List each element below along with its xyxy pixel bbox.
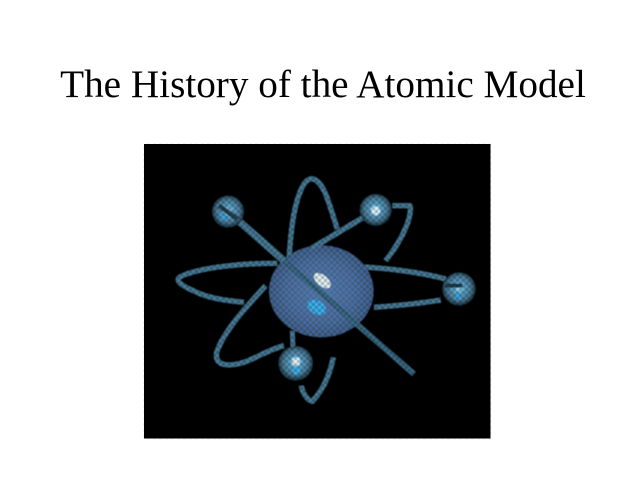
image background [144,144,490,438]
nucleus highlights [305,270,333,318]
electron: top right [360,194,392,226]
nucleus [269,245,374,337]
title: The History of the Atomic Model [60,63,586,106]
pixel dither overlay [144,144,491,439]
orbit rings [178,179,446,401]
orbit spokes [228,210,414,374]
electron: top left [212,196,244,228]
electron: right [442,272,476,306]
electron: bottom [278,346,313,381]
